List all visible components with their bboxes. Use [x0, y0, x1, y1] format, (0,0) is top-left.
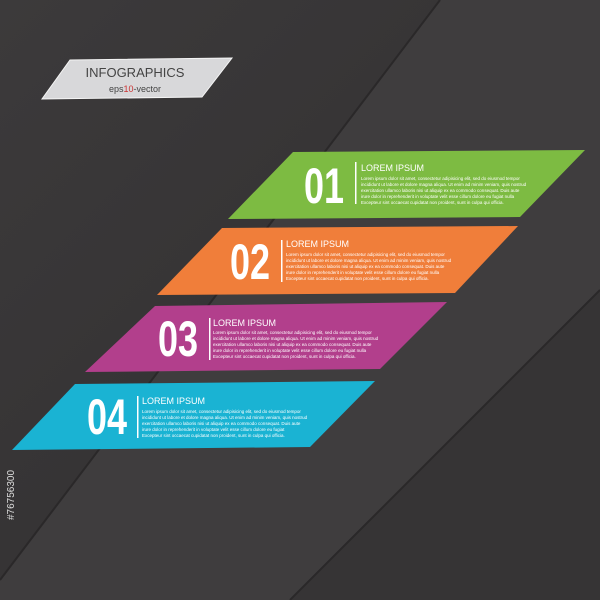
text block 01: Lorem ipsum dolor sit amet, consectetur adipisicing elit, sed do eiusmod tempor [361, 176, 520, 181]
text block 03: incididunt ut labore et dolore magna aliqua. Ut enim ad minim veniam, quis nostrud [213, 336, 379, 341]
panel 03 purple [85, 302, 447, 372]
text block 03: Excepteur sint occaecat cupidatat non proident, sunt in culpa qui officia. [213, 354, 356, 359]
text block 03: LOREM IPSUM [213, 318, 276, 328]
title label: eps10-vector [109, 84, 161, 94]
text block 04 [142, 396, 308, 438]
panel 02 orange [157, 226, 518, 295]
text block 02: Lorem ipsum dolor sit amet, consectetur adipisicing elit, sed do eiusmod tempor [286, 252, 445, 257]
text block 03 [213, 318, 379, 359]
panel 01 green [228, 150, 585, 219]
panel 04 blue [12, 381, 375, 450]
text block 04: irure dolor in reprehenderit in voluptate velit esse cillum dolore eu fugiat [142, 427, 285, 432]
text block 01: Excepteur sint occaecat cupidatat non proident, sunt in culpa qui officia. [361, 200, 504, 205]
stock id: #76756300 [6, 470, 17, 520]
number 04: 04 [87, 390, 127, 445]
text block 01 [361, 163, 527, 205]
text block 02 [286, 239, 452, 281]
text block 01: incididunt ut labore et dolore magna aliqua. Ut enim ad minim veniam, quis nostrud [361, 182, 527, 187]
text block 01: exercitation ullamco laboris nisi ut aliquip ex ea commodo consequat. Duis aute [361, 188, 520, 193]
text block 01: irure dolor in reprehenderit in voluptate velit esse cillum dolore eu fugiat nulla [361, 194, 515, 199]
text block 04: incididunt ut labore et dolore magna aliqua. Ut enim ad minim veniam, quis nostrud [142, 415, 308, 420]
text block 02: exercitation ullamco laboris nisi ut aliquip ex ea commodo consequat. Duis aute [286, 264, 445, 269]
text block 02: LOREM IPSUM [286, 239, 349, 249]
number 02: 02 [230, 235, 270, 290]
number 01: 01 [304, 159, 344, 214]
text block 04: exercitation ullamco laboris nisi ut aliquip ex ea commodo consequat. Duis aute [142, 421, 301, 426]
text block 03: Lorem ipsum dolor sit amet, consectetur adipisicing elit, sed do eiusmod tempor [213, 330, 372, 335]
text block 01: LOREM IPSUM [361, 163, 424, 173]
text block 02: Excepteur sint occaecat cupidatat non proident, sunt in culpa qui officia. [286, 276, 429, 281]
text block 03: irure dolor in reprehenderit in voluptate velit esse cillum dolore eu fugiat nulla [213, 348, 367, 353]
text block 02: incididunt ut labore et dolore magna aliqua. Ut enim ad minim veniam, quis nostrud [286, 258, 452, 263]
text block 04: LOREM IPSUM [142, 396, 205, 406]
text block 04: Excepteur sint occaecat cupidatat non proident, sunt in culpa qui officia. [142, 433, 285, 438]
title label [42, 58, 232, 99]
text block 02: irure dolor in reprehenderit in voluptate velit esse cillum dolore eu fugiat nulla [286, 270, 440, 275]
number 03: 03 [158, 312, 198, 367]
text block 04: Lorem ipsum dolor sit amet, consectetur adipisicing elit, sed do eiusmod tempor [142, 409, 301, 414]
title label: INFOGRAPHICS [86, 65, 185, 80]
text block 03: exercitation ullamco laboris nisi ut aliquip ex ea commodo consequat. Duis aute [213, 342, 372, 347]
